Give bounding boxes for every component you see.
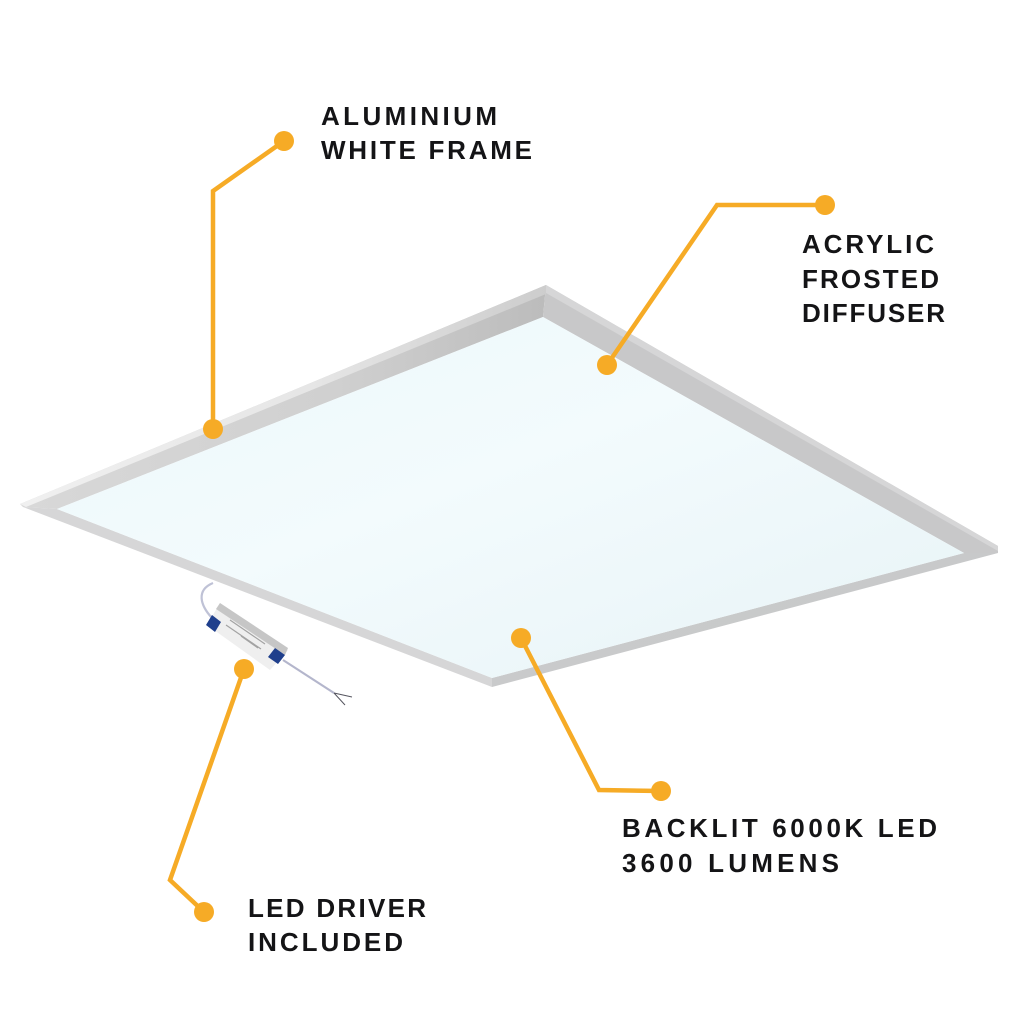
dot start xyxy=(815,195,835,215)
dot end xyxy=(651,781,671,801)
label: INCLUDED xyxy=(248,927,403,957)
LED panel xyxy=(20,285,998,687)
callout: aluminium white frame xyxy=(203,101,532,439)
label: BACKLIT 6000K LED xyxy=(622,813,937,843)
callout: backlit LED xyxy=(511,628,937,878)
label: WHITE FRAME xyxy=(321,135,532,165)
leader line xyxy=(213,141,284,429)
dot start xyxy=(274,131,294,151)
LED driver xyxy=(202,583,352,705)
driver body xyxy=(207,603,288,670)
driver end cap right xyxy=(268,648,285,664)
panel frame: top-left highlight xyxy=(20,285,546,507)
diffuser face xyxy=(57,317,964,678)
dot end xyxy=(597,355,617,375)
leader line xyxy=(170,669,244,912)
driver input wire xyxy=(202,583,213,618)
label: FROSTED xyxy=(802,264,939,294)
panel frame: top-right edge xyxy=(543,285,998,553)
leader line xyxy=(607,205,825,365)
dot start xyxy=(234,659,254,679)
dot start xyxy=(511,628,531,648)
dot end xyxy=(203,419,223,439)
dot end xyxy=(194,902,214,922)
driver output wire xyxy=(283,660,334,693)
callout: LED driver included xyxy=(170,659,426,957)
driver label xyxy=(226,620,265,649)
panel frame: top-right highlight xyxy=(546,285,998,551)
label: 3600 LUMENS xyxy=(622,848,839,878)
driver output wire fork xyxy=(334,693,352,705)
panel frame: top-left edge xyxy=(20,285,546,509)
leader line xyxy=(521,638,661,791)
callout: acrylic frosted diffuser xyxy=(597,195,945,375)
label: DIFFUSER xyxy=(802,298,945,328)
panel frame: bottom-left edge xyxy=(23,507,492,687)
driver top face xyxy=(216,603,288,655)
label: ALUMINIUM xyxy=(321,101,497,131)
driver end cap left xyxy=(206,615,221,632)
panel frame: bottom-right edge xyxy=(492,553,998,687)
label: ACRYLIC xyxy=(802,229,934,259)
label: LED DRIVER xyxy=(248,893,426,923)
